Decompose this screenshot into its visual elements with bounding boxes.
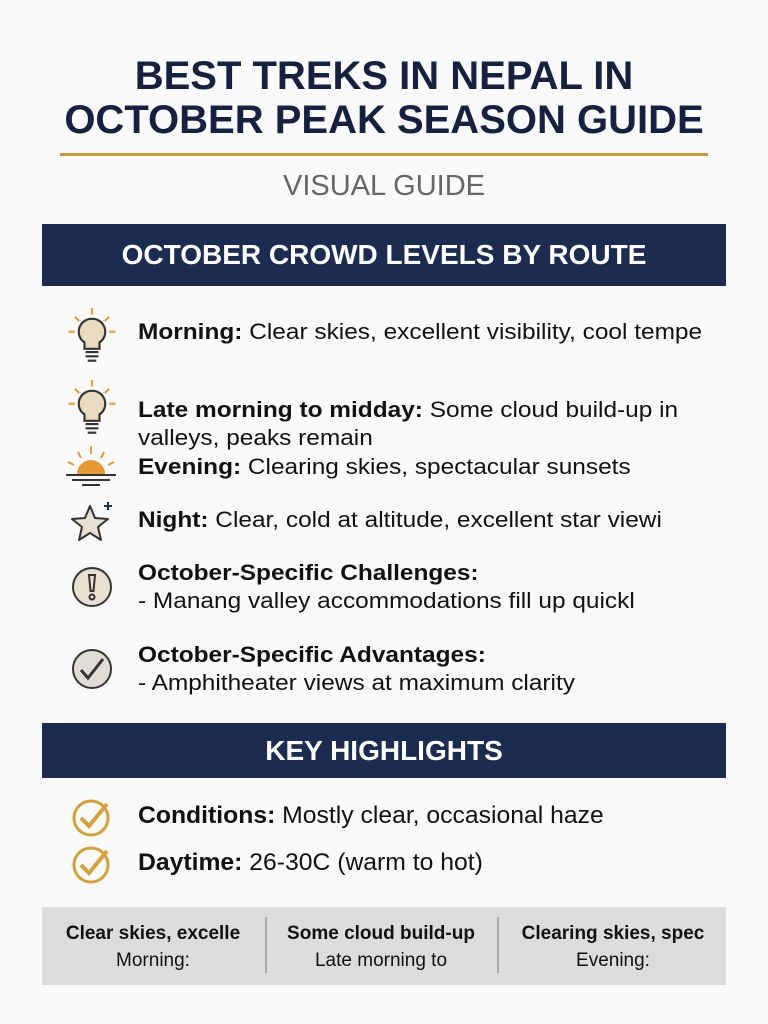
column: evening: Evening:	[576, 950, 650, 971]
column: morning: Morning:	[116, 950, 190, 971]
section header: crowd levels	[42, 224, 726, 286]
column: evening	[522, 923, 704, 971]
section header: crowd levels: OCTOBER CROWD LEVELS BY ROUTE	[122, 239, 646, 270]
summary table	[42, 907, 726, 985]
title: BEST TREKS IN NEPAL IN	[135, 54, 633, 98]
icon: check conditions	[72, 800, 110, 836]
text: challenges	[138, 560, 635, 613]
icon: check daytime	[72, 846, 110, 884]
text: evening: Evening: Clearing skies, spectacular sunsets	[138, 454, 631, 479]
text: daytime: Daytime: 26-30C (warm to hot)	[138, 849, 483, 876]
icon: check circle	[72, 649, 112, 689]
icon: star	[71, 502, 112, 541]
column: late morning: Some cloud build-up	[287, 923, 475, 944]
text: advantages: October-Specific Advantages:	[138, 642, 486, 667]
column: evening: Clearing skies, spec	[522, 923, 704, 944]
subtitle: VISUAL GUIDE	[283, 170, 485, 202]
icon: exclamation	[72, 567, 112, 607]
text: late morning: valleys, peaks remain	[138, 425, 373, 450]
text: morning: Morning: Clear skies, excellent visibility, cool tempe	[138, 319, 702, 344]
text: night: Night: Clear, cold at altitude, excellent star viewi	[138, 507, 662, 532]
text: advantages	[138, 642, 575, 695]
icon: bulb midday	[68, 380, 116, 434]
text: advantages: - Amphitheater views at maximum clarity	[138, 670, 575, 695]
title	[64, 54, 704, 142]
column: late morning: Late morning to	[315, 950, 447, 971]
text: late morning: Late morning to midday: Some cloud build-up in	[138, 397, 678, 422]
text: challenges: October-Specific Challenges:	[138, 560, 479, 585]
text: conditions: Conditions: Mostly clear, occasional haze	[138, 802, 604, 829]
section header: key highlights	[42, 723, 726, 778]
title: OCTOBER PEAK SEASON GUIDE	[64, 98, 704, 142]
column: morning	[66, 923, 240, 971]
section header: key highlights: KEY HIGHLIGHTS	[265, 735, 503, 766]
column: morning: Clear skies, excelle	[66, 923, 240, 944]
column: late morning	[287, 923, 475, 971]
text: challenges: - Manang valley accommodations fill up quickl	[138, 588, 635, 613]
icon: sunset	[66, 446, 116, 486]
text: late morning	[138, 397, 678, 450]
icon: bulb morning	[68, 308, 116, 362]
